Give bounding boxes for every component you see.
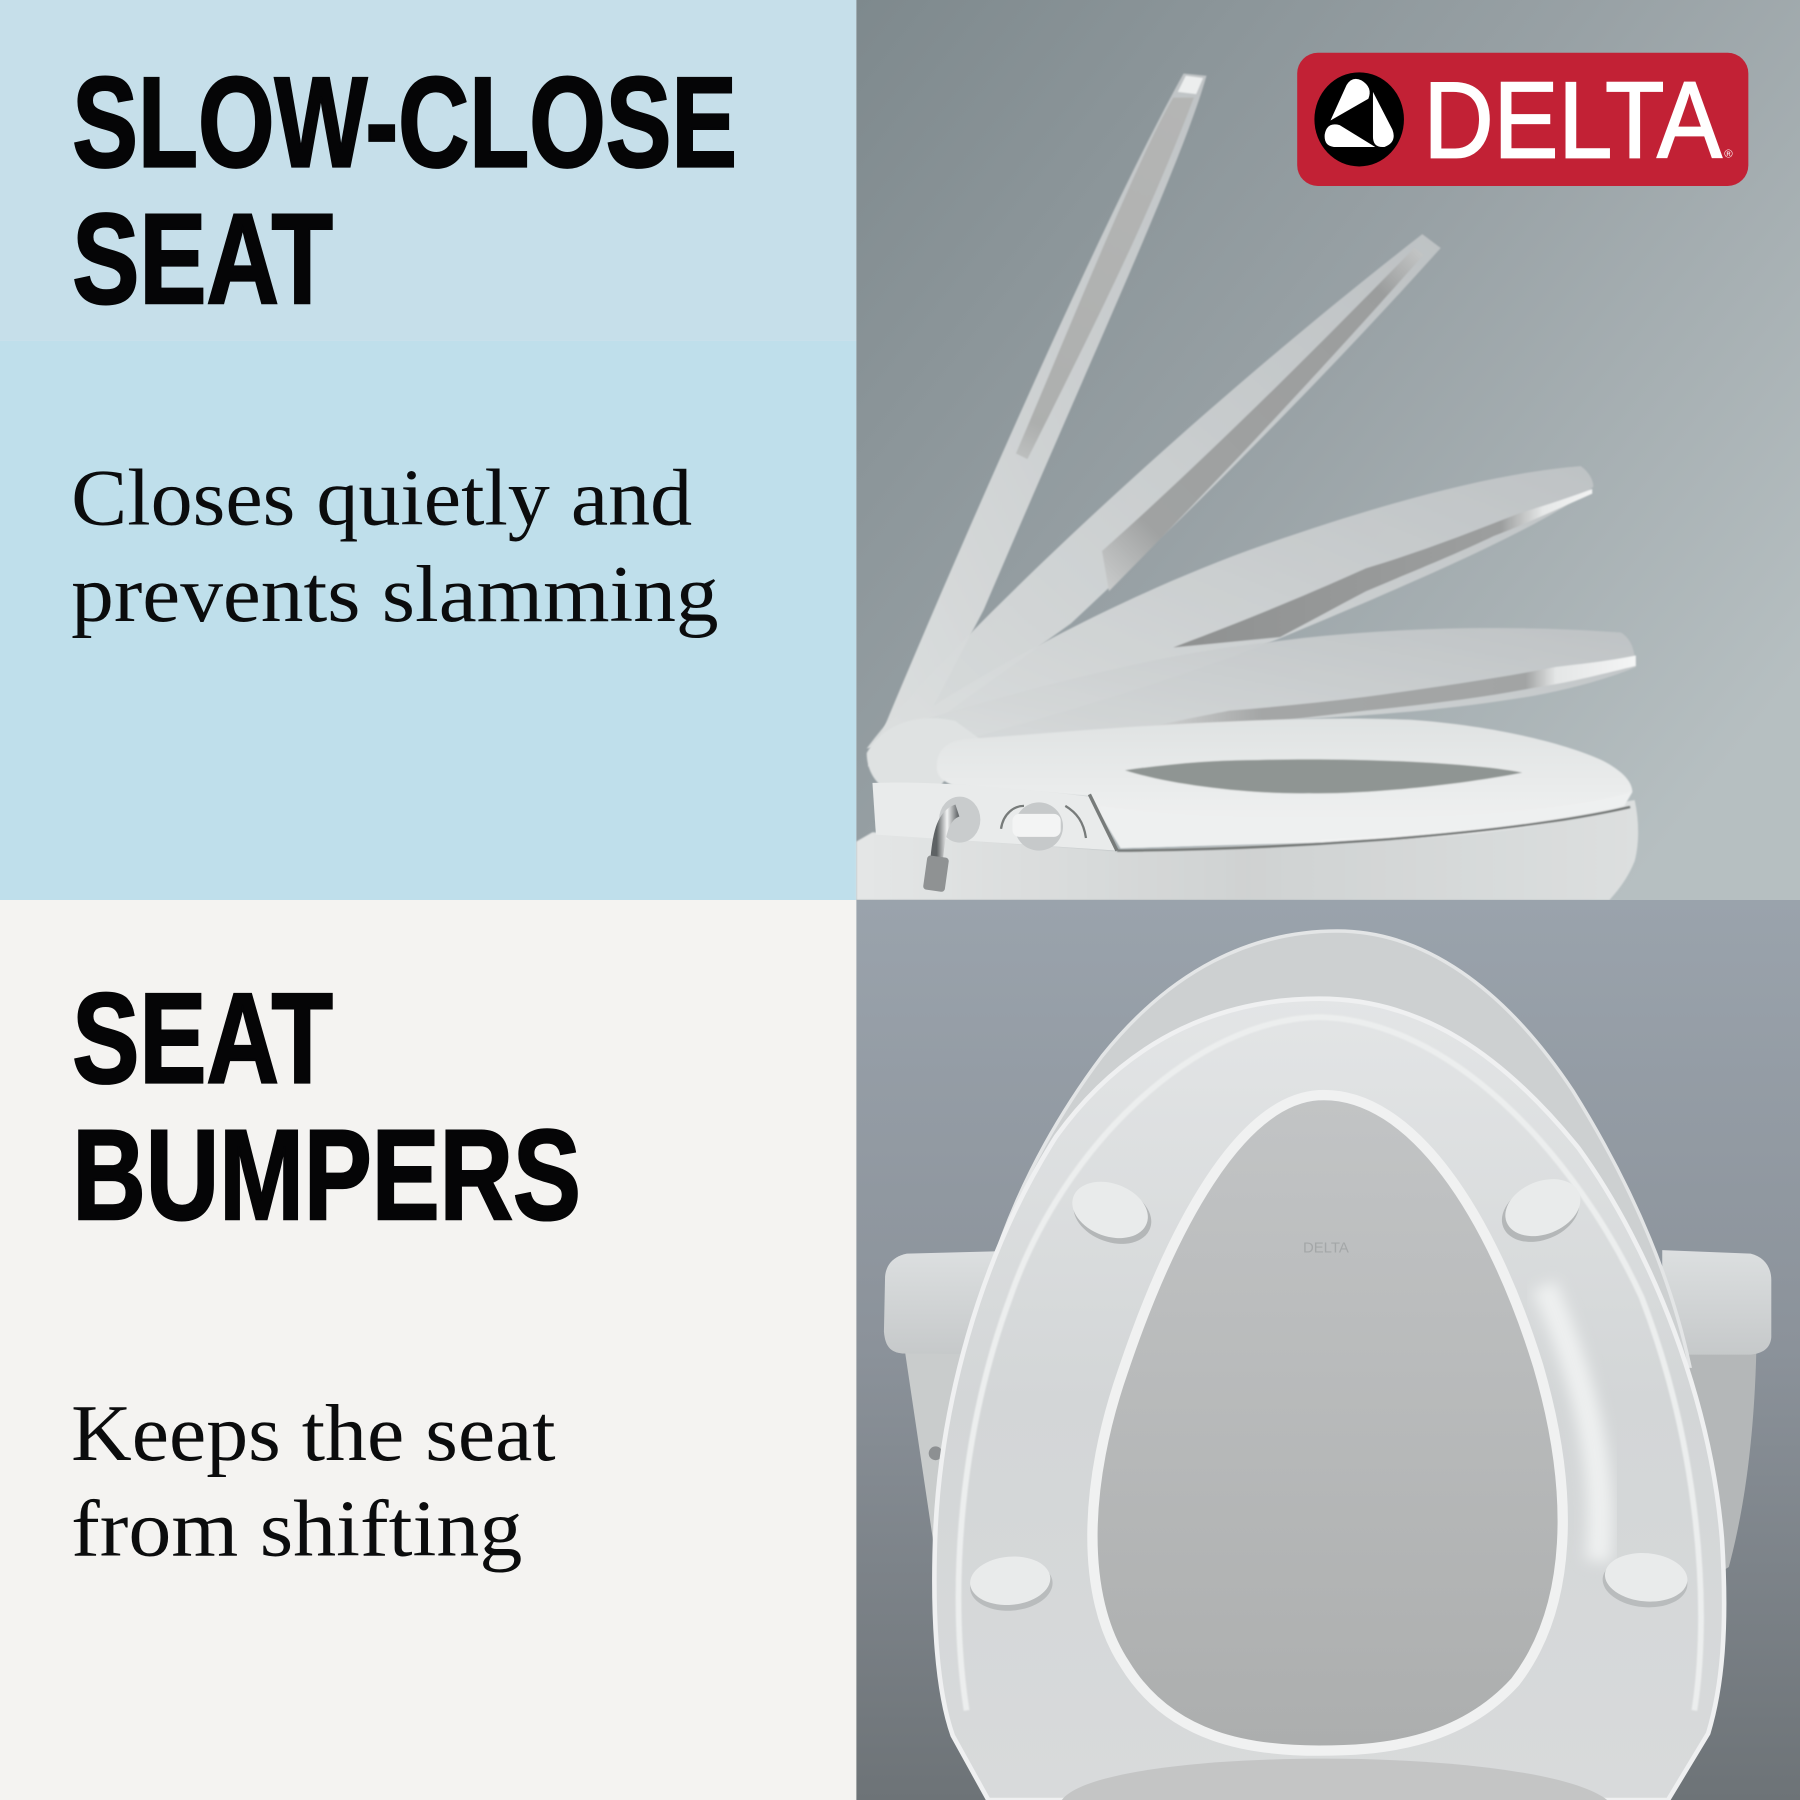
icon: lower right bumper [1601,1550,1690,1611]
text: seat bumpers description: Keeps the seat [71,1389,556,1478]
icon: Delta triangle mark [1314,72,1404,166]
text: Delta wordmark: DELTA [1423,59,1722,181]
heading: slow-close seat: SEAT [72,188,333,331]
illustration: hinge plate [872,783,1117,851]
text: embossed Delta mark: DELTA [1303,1239,1349,1256]
heading: seat bumpers: SEAT [72,968,333,1111]
panel: seat bumpers text panel [0,900,856,1800]
heading: seat bumpers [72,968,581,1247]
text: registered mark: ® [1724,148,1733,160]
illustration: toilet bowl [856,800,1638,900]
panel: toilet seat closing motion photo [856,0,1800,900]
heading: seat bumpers: BUMPERS [72,1104,581,1247]
illustration: raised seat lid behind [971,931,1690,1366]
illustration: seat lid fully open [868,73,1207,767]
text: slow-close description: prevents slamming [71,550,719,639]
illustration: seat lid three quarters open [867,234,1441,748]
text: seat bumpers description: from shifting [71,1484,522,1573]
icon: chrome valve [923,797,980,892]
text: slow-close description: Closes quietly and [71,454,692,543]
panel: seat bumpers underside photo [856,900,1800,1800]
text: seat bumpers description [71,1389,556,1573]
illustration: seat lid half open [907,466,1593,746]
illustration: seat opening [1062,1095,1607,1800]
icon: upper left bumper [1064,1172,1160,1254]
panel: slow-close text panel [0,0,856,900]
icon: lower left bumper [968,1553,1055,1614]
text: slow-close description [71,454,719,639]
illustration: seat underside [934,999,1724,1800]
illustration: seat lid nearly closed [908,628,1636,767]
illustration: hinge mass where lids meet [867,718,990,792]
heading: slow-close seat: SLOW-CLOSE [72,51,737,194]
icon: adjustment knob [1001,802,1086,851]
logo: Delta badge [1297,53,1748,186]
heading: slow-close seat [72,51,737,331]
illustration: toilet tank [884,1250,1771,1607]
icon: upper right bumper [1493,1169,1589,1253]
illustration: seat ring with bowl opening [937,719,1632,851]
